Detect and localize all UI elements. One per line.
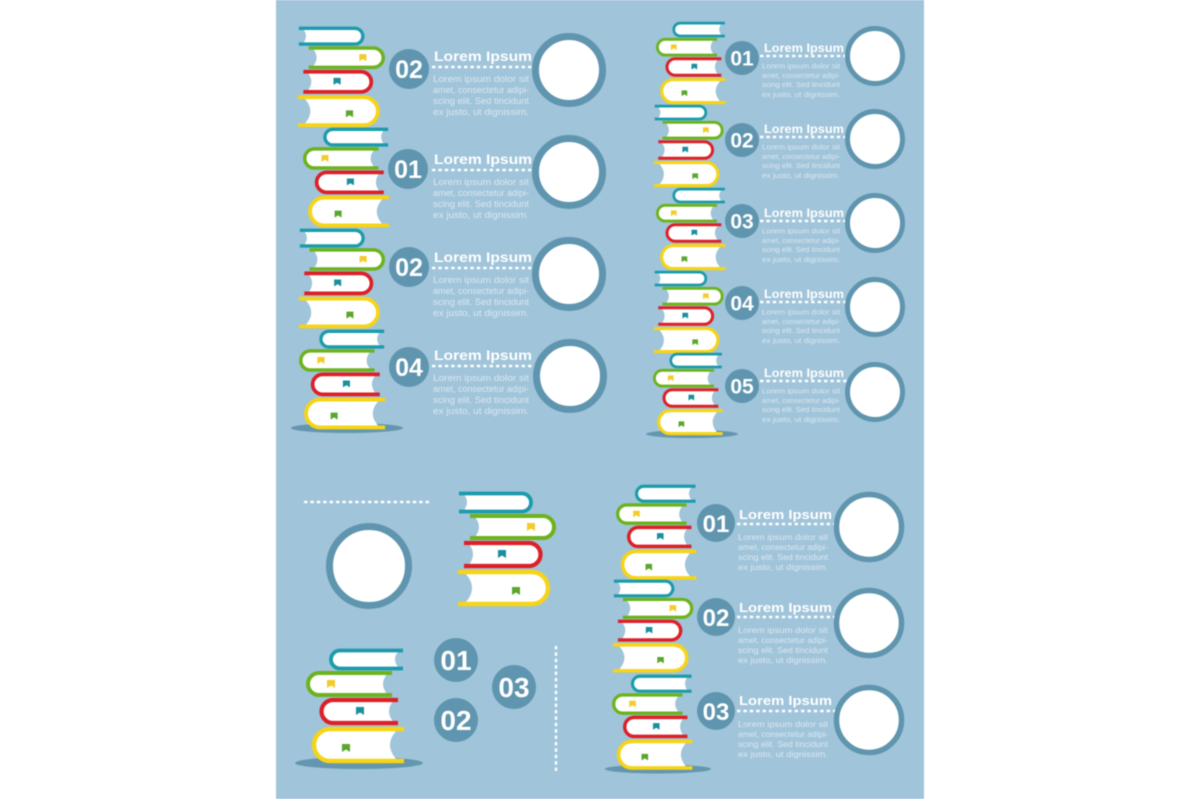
panel: right column infographic [646,23,902,438]
row: 02 Lorem Ipsum: ex justo, ut dignissim. [762,171,840,180]
row: 04 Lorem Ipsum: ex justo, ut dignissim. [762,336,840,345]
row: 02 Lorem Ipsum [697,590,902,665]
row: 02 Lorem Ipsum: Lorem ipsum dolor sit [738,625,829,635]
row: 04 Lorem Ipsum [389,342,604,416]
row: 04 Lorem Ipsum: Lorem ipsum dolor sit [762,308,840,316]
row: 02 Lorem Ipsum: amet, consectetur adipi- [738,635,828,645]
icon: book stack 1 [657,23,726,103]
row: 05 Lorem Ipsum: ex justo, ut dignissim. [762,415,840,424]
icon: book stack 2 [613,581,692,671]
row: 03 Lorem Ipsum [725,196,902,264]
shadow under left stacks [291,423,403,433]
row: 01 Lorem Ipsum: Lorem ipsum dolor sit [738,532,829,542]
row: 02 Lorem Ipsum: scing elit. Sed tincidunt [433,96,530,106]
badge 03: 03 [498,672,530,703]
row: 04 Lorem Ipsum: Lorem Ipsum [434,347,532,363]
icon: book stack 3 [614,676,692,768]
row: 04 Lorem Ipsum: scing elit. Sed tincidunt [762,326,840,335]
panel: lower-right infographic [605,486,902,774]
row: 02 Lorem Ipsum [725,112,902,180]
row: 01 Lorem Ipsum: Lorem Ipsum [434,151,532,167]
row: 04 Lorem Ipsum: Lorem Ipsum [764,289,844,301]
row: 02 Lorem Ipsum: 02 [703,605,729,632]
shadow under right stacks [646,430,738,438]
shadow under stack [295,757,423,769]
row: 02 Lorem Ipsum: 02 [395,254,423,282]
row: 05 Lorem Ipsum: 05 [730,376,754,398]
row: 01 Lorem Ipsum [725,28,902,99]
row: 03 Lorem Ipsum: Lorem Ipsum [764,208,844,220]
row: 03 Lorem Ipsum: ex justo, ut dignissim. [738,749,828,759]
icon: book stack 3 [657,189,726,269]
row: 02 Lorem Ipsum: ex justo, ut dignissim. [738,655,828,665]
row: 02 Lorem Ipsum: scing elit. Sed tincidunt [433,297,530,307]
icon: book stack 4 [654,272,722,352]
row: 01 Lorem Ipsum: scing elit. Sed tincidunt [433,199,530,209]
panel: left column infographic [291,28,604,433]
row: 01 Lorem Ipsum: 01 [703,511,729,538]
row: 03 Lorem Ipsum: scing elit. Sed tincidunt [738,739,829,749]
row: 04 Lorem Ipsum: scing elit. Sed tincidunt [433,395,530,405]
row: 01 Lorem Ipsum: ex justo, ut dignissim. [738,562,828,572]
icon: book stack 4 [301,331,385,427]
row: 02 Lorem Ipsum: 02 [395,56,423,84]
row: 05 Lorem Ipsum: Lorem ipsum dolor sit [762,386,840,396]
icon: book stack 1 [298,28,383,125]
row: 04 Lorem Ipsum: 04 [395,354,423,382]
badge 02 [434,698,478,742]
panel: blue background [276,0,924,799]
row: 01 Lorem Ipsum: Lorem Ipsum [739,507,832,522]
icon: book stack 2 [654,106,722,186]
row: 01 Lorem Ipsum [697,494,902,572]
row: 02 Lorem Ipsum: Lorem Ipsum [434,249,532,265]
row: 03 Lorem Ipsum: amet, consectetur adipi- [762,236,841,245]
icon: book stack 1 [618,486,696,578]
row: 03 Lorem Ipsum: Lorem ipsum dolor sit [738,719,829,729]
row: 02 Lorem Ipsum: ex justo, ut dignissim. [433,107,529,117]
row: 02 Lorem Ipsum: 02 [730,130,754,152]
row: 05 Lorem Ipsum [725,364,902,424]
icon: book stack 2 [305,129,389,225]
row: 02 Lorem Ipsum [389,36,602,117]
icon: book stack 3 [299,230,383,326]
row: 01 Lorem Ipsum: ex justo, ut dignissim. [433,210,529,220]
panel: bottom-left elements [295,494,556,771]
row: 01 Lorem Ipsum: ex justo, ut dignissim. [762,90,840,99]
row: 02 Lorem Ipsum: scing elit. Sed tincidunt [762,161,840,170]
row: 02 Lorem Ipsum: Lorem Ipsum [764,124,844,136]
row: 01 Lorem Ipsum: Lorem ipsum dolor sit [762,62,840,70]
row: 01 Lorem Ipsum: scing elit. Sed tincidunt [762,80,840,89]
row: 04 Lorem Ipsum: amet, consectetur adipi- [762,317,841,326]
row: 01 Lorem Ipsum: Lorem Ipsum [764,43,844,55]
row: 01 Lorem Ipsum: 01 [394,156,422,184]
row: 05 Lorem Ipsum: scing elit. Sed tincidunt [762,405,840,414]
row: 01 Lorem Ipsum: Lorem ipsum dolor sit [433,177,530,187]
row: 02 Lorem Ipsum: amet, consectetur adipi- [433,85,529,95]
badge 01: 01 [440,645,472,676]
row: 04 Lorem Ipsum: ex justo, ut dignissim. [433,406,529,416]
row: 01 Lorem Ipsum: 01 [730,48,754,70]
row: 01 Lorem Ipsum: scing elit. Sed tincidunt [738,552,829,562]
row: 03 Lorem Ipsum: Lorem Ipsum [739,693,832,708]
row: 03 Lorem Ipsum: ex justo, ut dignissim. [762,255,840,264]
row: 02 Lorem Ipsum: amet, consectetur adipi- [433,286,529,296]
row: 05 Lorem Ipsum: amet, consectetur adipi- [762,396,841,405]
row: 03 Lorem Ipsum: amet, consectetur adipi- [738,729,828,739]
row: 05 Lorem Ipsum: Lorem Ipsum [764,368,844,380]
badge 03 [492,665,536,709]
row: 02 Lorem Ipsum: Lorem Ipsum [434,48,532,64]
row: 02 Lorem Ipsum: amet, consectetur adipi- [762,152,841,161]
dashed divider vertical [555,646,557,771]
icon: book stack 5 [654,354,723,434]
badge 02: 02 [440,705,472,736]
row: 03 Lorem Ipsum: 03 [730,210,754,234]
row: 01 Lorem Ipsum: amet, consectetur adipi- [738,542,828,552]
row: 02 Lorem Ipsum: Lorem ipsum dolor sit [433,275,530,285]
row: 03 Lorem Ipsum: Lorem ipsum dolor sit [762,226,840,236]
empty circle [330,526,408,606]
row: 02 Lorem Ipsum: scing elit. Sed tincidunt [738,645,829,655]
row: 04 Lorem Ipsum: amet, consectetur adipi- [433,384,529,394]
row: 02 Lorem Ipsum [389,240,602,318]
row: 04 Lorem Ipsum [725,280,902,345]
dashed divider horizontal [304,501,430,503]
row: 03 Lorem Ipsum: 03 [703,699,729,726]
row: 01 Lorem Ipsum: amet, consectetur adipi- [762,71,841,80]
icon: book stack top [458,494,554,604]
row: 03 Lorem Ipsum: scing elit. Sed tincidunt [762,245,840,254]
row: 03 Lorem Ipsum [697,688,902,759]
badge 01 [434,638,478,682]
row: 04 Lorem Ipsum: 04 [730,292,754,316]
row: 02 Lorem Ipsum: Lorem ipsum dolor sit [433,74,530,84]
row: 02 Lorem Ipsum: Lorem ipsum dolor sit [762,142,840,152]
row: 01 Lorem Ipsum [388,138,602,220]
row: 04 Lorem Ipsum: Lorem ipsum dolor sit [433,373,530,383]
row: 02 Lorem Ipsum: Lorem Ipsum [739,600,832,615]
row: 02 Lorem Ipsum: ex justo, ut dignissim. [433,308,529,318]
row: 01 Lorem Ipsum: amet, consectetur adipi- [433,188,529,198]
icon: book stack bottom [308,650,404,761]
shadow under lower stacks [605,764,711,774]
